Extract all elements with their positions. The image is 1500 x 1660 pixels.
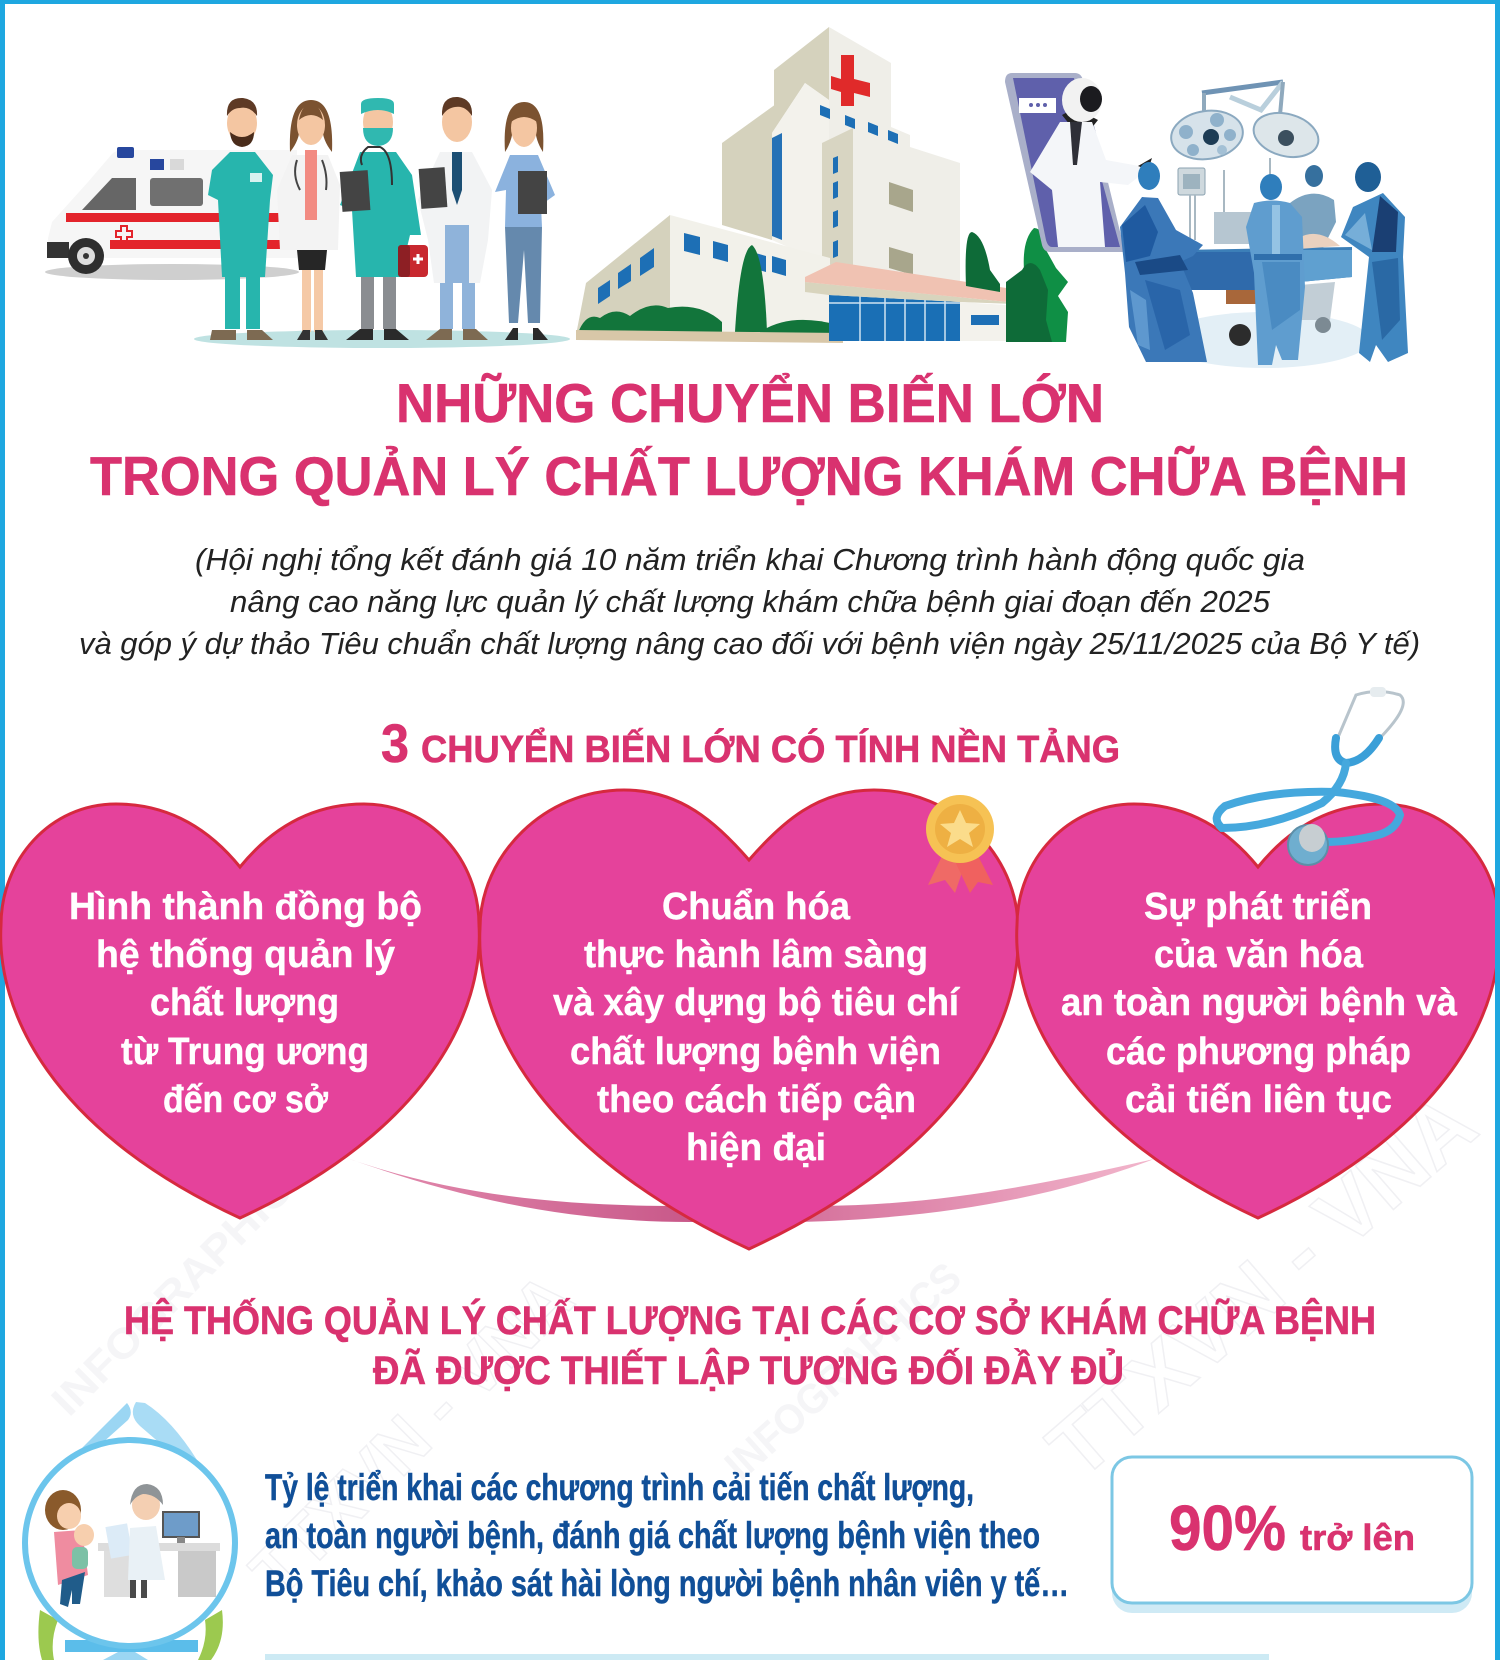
- body text: quality programme rate: Tỷ lệ triển khai các chương trình cải tiến chất lượng,: [265, 1467, 974, 1508]
- circle: [25, 1440, 235, 1646]
- icon: stethoscope: [1217, 687, 1403, 865]
- monitor and equipment: [1178, 158, 1270, 244]
- section heading: quality management system: ĐÃ ĐƯỢC THIẾT LẬP TƯƠNG ĐỐI ĐẦY ĐỦ: [373, 1347, 1124, 1393]
- heart 3: cải tiến liên tục: [1125, 1079, 1392, 1121]
- icon: DNA ribbon with doctor and patient: [25, 1402, 235, 1660]
- subtitle: [79, 542, 1420, 661]
- heart 1: từ Trung ương: [121, 1031, 369, 1073]
- person: male doctor with tie: [418, 97, 492, 340]
- illustration: hospital building: [576, 27, 1068, 343]
- section heading: 3 foundational changes: CHUYỂN BIẾN LỚN CÓ TÍNH NỀN TẢNG: [421, 726, 1120, 771]
- operating table: [1178, 234, 1352, 346]
- heart 2: hiện đại: [686, 1127, 826, 1169]
- person: surgeon with red medical bag: [340, 98, 428, 340]
- icon: gold medal: [926, 795, 994, 893]
- surgeon right: [1341, 162, 1408, 362]
- title: NHỮNG CHUYỂN BIẾN LỚN: [396, 372, 1104, 434]
- stat card: 90% or more: trở lên: [1300, 1517, 1415, 1558]
- surgeon left: [1120, 162, 1207, 362]
- heart 3: an toàn người bệnh và: [1061, 982, 1458, 1024]
- body text: quality programme rate: an toàn người bệnh, đánh giá chất lượng bệnh viện theo: [265, 1515, 1040, 1556]
- illustration: AI doctor robot on phone: [1005, 73, 1152, 252]
- page border right edge over heart: [1495, 790, 1500, 1230]
- person: nurse with clipboard: [495, 102, 555, 340]
- heart 3: các phương pháp: [1106, 1031, 1411, 1073]
- left wing: [576, 215, 843, 343]
- heart 1: đến cơ sở: [163, 1079, 329, 1121]
- heart 3: của văn hóa: [1154, 934, 1364, 976]
- doctor at desk: [98, 1484, 220, 1598]
- trees: [966, 228, 1068, 342]
- heart 2: Chuẩn hóa: [662, 886, 851, 928]
- subtitle: và góp ý dự thảo Tiêu chuẩn chất lượng nâng cao đối với bệnh viện ngày 25/11/2025 của Bộ Y tế): [79, 626, 1420, 661]
- watermark: [42, 1076, 1493, 1611]
- heart 2: theo cách tiếp cận: [597, 1079, 916, 1121]
- heart 1: chất lượng: [150, 982, 339, 1024]
- heart 3: [1017, 804, 1499, 1218]
- icon: red first-aid bag: [398, 245, 428, 277]
- watermark: TTXVN - VNA: [1030, 1076, 1493, 1496]
- illustration: ambulance: [45, 147, 299, 280]
- assistant surgeon: [1305, 165, 1323, 187]
- heart 1: [1, 804, 479, 1218]
- title: [90, 372, 1408, 507]
- mother with baby: [45, 1490, 94, 1607]
- stat card: 90% or more: 90%: [1169, 1492, 1286, 1564]
- stat card: 90% or more: [1112, 1457, 1472, 1613]
- section heading: 3 foundational changes: 3: [381, 714, 409, 774]
- operating lights: [1168, 82, 1323, 164]
- heart 2: [480, 790, 1018, 1249]
- ribbon: [38, 1402, 223, 1660]
- title: TRONG QUẢN LÝ CHẤT LƯỢNG KHÁM CHỮA BỆNH: [90, 445, 1408, 507]
- floor: [1160, 312, 1370, 368]
- tower: [722, 27, 960, 300]
- heart 2: và xây dựng bộ tiêu chí: [553, 982, 960, 1024]
- illustration: surgical team: [1120, 82, 1408, 368]
- section heading: quality management system: HỆ THỐNG QUẢN LÝ CHẤT LƯỢNG TẠI CÁC CƠ SỞ KHÁM CHỮA BỆNH: [124, 1297, 1376, 1343]
- illustration: medical staff: [194, 97, 570, 348]
- heart 2: thực hành lâm sàng: [584, 934, 928, 976]
- subtitle: (Hội nghị tổng kết đánh giá 10 năm triển khai Chương trình hành động quốc gia: [195, 542, 1305, 577]
- connecting swoosh: [344, 1157, 1154, 1222]
- body text: quality programme rate: [265, 1467, 1069, 1604]
- person: bearded doctor in teal: [208, 98, 273, 340]
- entrance canopy: [805, 262, 1039, 341]
- watermark: TTXVN - VNA: [235, 1258, 588, 1611]
- watermark: INFOGRAPHICS: [42, 1144, 323, 1424]
- heart 1: Hình thành đồng bộ: [69, 886, 422, 928]
- person: woman doctor in white coat: [277, 100, 340, 340]
- divider: [265, 1654, 1269, 1660]
- heart 1: hệ thống quản lý: [96, 934, 395, 976]
- watermark: INFOGRAPHICS: [716, 1253, 970, 1489]
- body text: quality programme rate: Bộ Tiêu chí, khảo sát hài lòng người bệnh nhân viên y tế…: [265, 1563, 1069, 1604]
- subtitle: nâng cao năng lực quản lý chất lượng khám chữa bệnh giai đoạn đến 2025: [230, 584, 1271, 619]
- section heading: 3 foundational changes: [381, 714, 1120, 774]
- section heading: quality management system: [124, 1297, 1376, 1393]
- heart 3: Sự phát triển: [1144, 886, 1372, 928]
- ground shadow: [194, 330, 570, 348]
- heart 2: chất lượng bệnh viện: [570, 1031, 941, 1073]
- surgeon centre: [1246, 174, 1305, 365]
